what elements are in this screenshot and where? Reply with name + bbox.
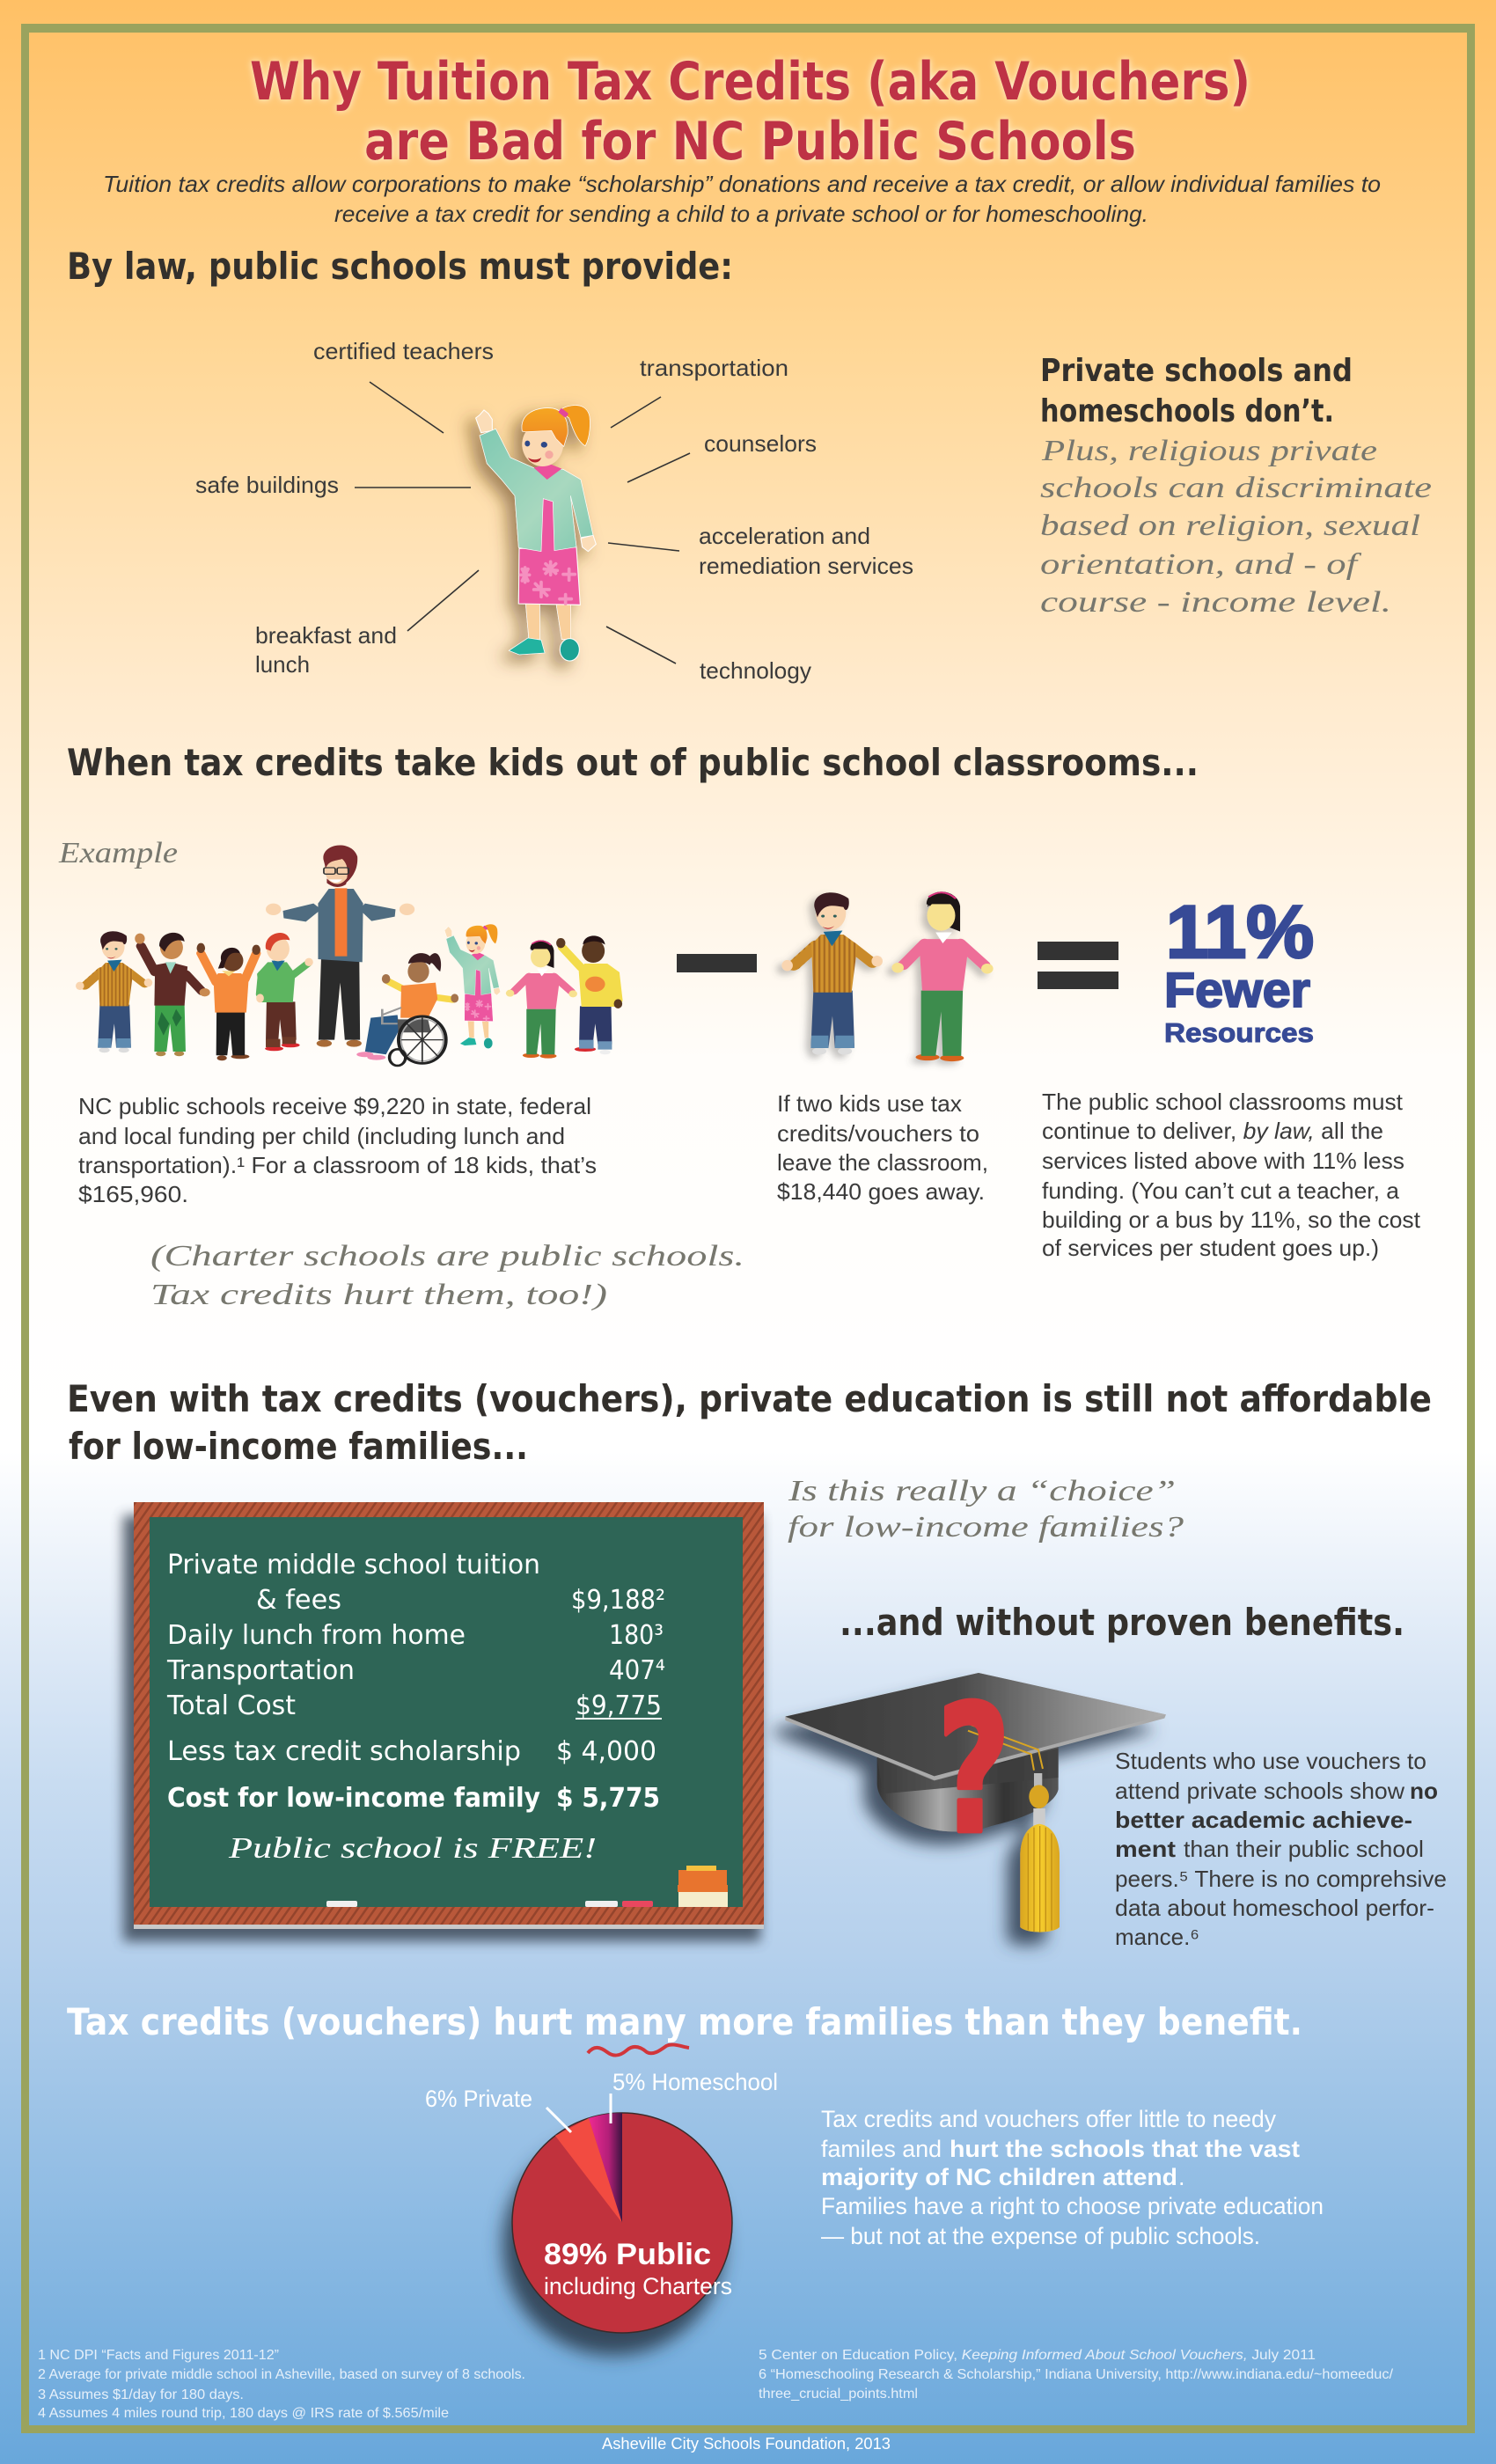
connector lines (355, 382, 690, 664)
intro text (103, 171, 1381, 227)
text: funding per child: transportation).¹ For a classroom of 18 kids, that’s (78, 1152, 597, 1178)
private schools note: schools can discriminate (1040, 472, 1432, 504)
text: offer little to needy: majority of NC children attend (821, 2164, 1177, 2190)
pie labels (425, 2069, 778, 2299)
text: must continue: funding. (You can’t cut a teacher, a (1042, 1177, 1400, 1204)
handwritten note: charter schools: Tax credits hurt them, too!) (150, 1279, 607, 1311)
cost table: $ 4,000 (556, 1736, 656, 1767)
service labels: safe buildings (195, 472, 339, 498)
text: funding per child: and local funding per child (including lunch and (78, 1123, 565, 1149)
service labels: breakfast and (255, 622, 397, 649)
text: no better achievement: ment (1115, 1836, 1176, 1862)
handwritten note: choice: for low-income families? (788, 1511, 1184, 1544)
cost table: $ 5,775 (556, 1783, 660, 1814)
text: offer little to needy: . (1178, 2164, 1185, 2190)
text: offer little to needy: Tax credits and vouchers offer little to needy (821, 2106, 1276, 2132)
boy (781, 892, 883, 1055)
text: funding per child: NC public schools receive $9,220 in state, federal (78, 1093, 591, 1119)
services diagram (195, 338, 913, 684)
text: offer little to needy: Families have a right to choose private education (821, 2193, 1324, 2219)
service labels: transportation (640, 355, 788, 381)
chalk pieces and eraser (326, 1866, 728, 1907)
text: must continue: of services per student goes up.) (1042, 1235, 1379, 1261)
private schools note: course - income level. (1040, 586, 1391, 619)
text: no better achievement: attend private schools show (1115, 1778, 1404, 1804)
two kids leaving (781, 891, 994, 1061)
title: Why Tuition Tax Credits (aka Vouchers) (250, 51, 1250, 113)
handwritten note: charter schools (150, 1240, 744, 1311)
handwritten: public school is free: Public school is FREE! (228, 1832, 597, 1865)
text: no better achievement: mance.⁶ (1115, 1924, 1199, 1950)
text: funding per child (78, 1093, 597, 1207)
cost table: Private middle school tuition (167, 1550, 540, 1580)
footnotes left (38, 2348, 525, 2421)
chalkboard (123, 1502, 764, 1941)
heading: not affordable: for low-income families... (69, 1425, 528, 1468)
kid maroon sweater (135, 933, 210, 1056)
cost table: 407⁴ (609, 1655, 665, 1686)
heading: by law: By law, public schools must provide: (67, 245, 733, 288)
heading: not affordable (67, 1377, 1432, 1468)
text: offer little to needy: — but not at the expense of public schools. (821, 2223, 1260, 2249)
text: two kids: If two kids use tax (777, 1090, 962, 1117)
minus sign (677, 954, 757, 972)
service labels: remediation services (699, 553, 913, 579)
callout: 11% fewer resources: Fewer (1164, 962, 1310, 1017)
cost table: $9,775 (576, 1690, 662, 1721)
text: no better achievement: no (1410, 1778, 1438, 1804)
teacher (266, 845, 414, 1047)
pie labels: 5% Homeschool (612, 2069, 778, 2095)
private slice (555, 2118, 622, 2223)
kid green sweater (256, 933, 313, 1051)
board shadow (123, 1515, 760, 1941)
text: two kids: $18,440 goes away. (777, 1178, 985, 1205)
handwritten note: choice (788, 1475, 1184, 1544)
private schools note: orientation, and - of (1040, 548, 1362, 581)
text: offer little to needy: hurt the schools that the vast (950, 2136, 1300, 2162)
cost table: Transportation (166, 1655, 355, 1686)
red squiggle under many (588, 2044, 689, 2056)
private schools note: Plus, religious private (1041, 435, 1377, 467)
cost table: Daily lunch from home (167, 1620, 466, 1651)
public slice (512, 2113, 732, 2333)
private schools note: based on religion, sexual (1040, 510, 1420, 542)
pie chart (425, 2069, 778, 2333)
cost table: Total Cost (166, 1690, 296, 1721)
text: offer little to needy: familes and (821, 2136, 942, 2162)
footnotes right: three_crucial_points.html (759, 2387, 918, 2402)
service labels: technology (700, 657, 811, 684)
text: must continue: services listed above with 11% less (1042, 1148, 1404, 1174)
handwritten note: choice: Is this really a “choice” (788, 1475, 1176, 1507)
cost table: & fees (256, 1585, 341, 1616)
handwritten example: Example (58, 837, 178, 869)
callout: 11% fewer resources: 11% (1166, 891, 1314, 973)
text: two kids: leave the classroom, (777, 1149, 988, 1176)
footnotes right: 6 “Homeschooling Research & Scholarship,” Indiana University, http://www.indiana.edu/~homeeduc/ (759, 2367, 1394, 2382)
homeschool slice (589, 2113, 622, 2223)
kid in wheelchair (356, 953, 458, 1066)
handwritten note: charter schools: (Charter schools are public schools. (150, 1240, 744, 1272)
pie labels: including Charters (544, 2273, 732, 2299)
footnotes left: 2 Average for private middle school in Asheville, based on survey of 8 schools. (38, 2367, 525, 2382)
private schools note (1040, 353, 1432, 619)
footnotes right: 5 Center on Education Policy, Keeping Informed About School Vouchers, July 2011 (759, 2348, 1316, 2363)
footnotes left: 3 Assumes $1/day for 180 days. (38, 2387, 244, 2402)
callout: 11% fewer resources (1164, 891, 1314, 1048)
classroom illustration (76, 845, 622, 1066)
intro text: Tuition tax credits allow corporations to make “scholarship” donations and receive a tax credit, or allow individual families to (103, 171, 1381, 197)
intro text: receive a tax credit for sending a child to a private school or for homeschooling. (334, 201, 1148, 227)
title: are Bad for NC Public Schools (364, 111, 1136, 172)
callout: 11% fewer resources: Resources (1164, 1017, 1314, 1048)
heading: without proven benefits: ...and without proven benefits. (840, 1601, 1404, 1644)
kid orange polka (197, 943, 260, 1060)
private schools note: homeschools don’t. (1040, 393, 1334, 429)
footnotes right (759, 2348, 1394, 2402)
credit line: Asheville City Schools Foundation, 2013 (602, 2435, 891, 2453)
icon: graduation cap with question mark (785, 1668, 1166, 1932)
cost table: 180³ (609, 1620, 664, 1651)
cost table: $9,188² (571, 1585, 665, 1616)
cap (785, 1673, 1166, 1932)
text: offer little to needy (821, 2106, 1324, 2249)
text: no better achievement: peers.⁵ There is no comprehsive (1115, 1866, 1447, 1892)
service labels: lunch (255, 651, 310, 678)
text: two kids: credits/vouchers to (777, 1120, 979, 1147)
text: must continue (1042, 1089, 1421, 1261)
text: must continue: building or a bus by 11%, so the cost (1042, 1206, 1421, 1233)
cost table: Cost for low-income family (167, 1783, 540, 1814)
text: no better achievement: data about homeschool perfor- (1115, 1895, 1434, 1921)
private schools note: Private schools and (1040, 353, 1353, 389)
heading: hurt many more families: Tax credits (vouchers) hurt many more families than they benefit. (67, 2000, 1302, 2043)
kid yellow sweater (556, 935, 622, 1054)
kid striped boy (76, 931, 152, 1052)
pie labels: 89% Public (544, 2238, 711, 2271)
service labels: acceleration and (699, 523, 870, 549)
question mark: ? (937, 1668, 1010, 1874)
girl (891, 891, 994, 1061)
text: funding per child: $165,960. (78, 1181, 188, 1207)
kid pink sweater (506, 941, 577, 1059)
green board (150, 1517, 743, 1907)
service labels (195, 338, 913, 684)
cost table: Less tax credit scholarship (167, 1736, 521, 1767)
service labels: counselors (704, 430, 817, 457)
text: must continue: The public school classrooms must (1042, 1089, 1404, 1115)
heading: classrooms: When tax credits take kids out of public school classrooms... (67, 741, 1199, 784)
kid girl teal cardigan (444, 924, 501, 1049)
text: no better achievement (1115, 1748, 1447, 1950)
text: must continue: continue to deliver, by law, all the (1042, 1118, 1383, 1144)
icon: girl (476, 406, 596, 661)
equals sign (1038, 942, 1118, 989)
footnotes left: 4 Assumes 4 miles round trip, 180 days @ IRS rate of $.565/mile (38, 2406, 449, 2421)
title (250, 51, 1250, 172)
cost table (166, 1550, 665, 1814)
service labels: certified teachers (313, 338, 494, 364)
text: no better achievement: better academic achieve- (1115, 1807, 1412, 1833)
pie labels: 6% Private (425, 2086, 532, 2112)
text: no better achievement: than their public school (1184, 1836, 1424, 1862)
footnotes left: 1 NC DPI “Facts and Figures 2011-12” (38, 2348, 279, 2363)
text: no better achievement: Students who use vouchers to (1115, 1748, 1426, 1774)
wood frame (134, 1502, 764, 1925)
label lines (546, 2094, 611, 2132)
text: two kids (777, 1090, 988, 1205)
